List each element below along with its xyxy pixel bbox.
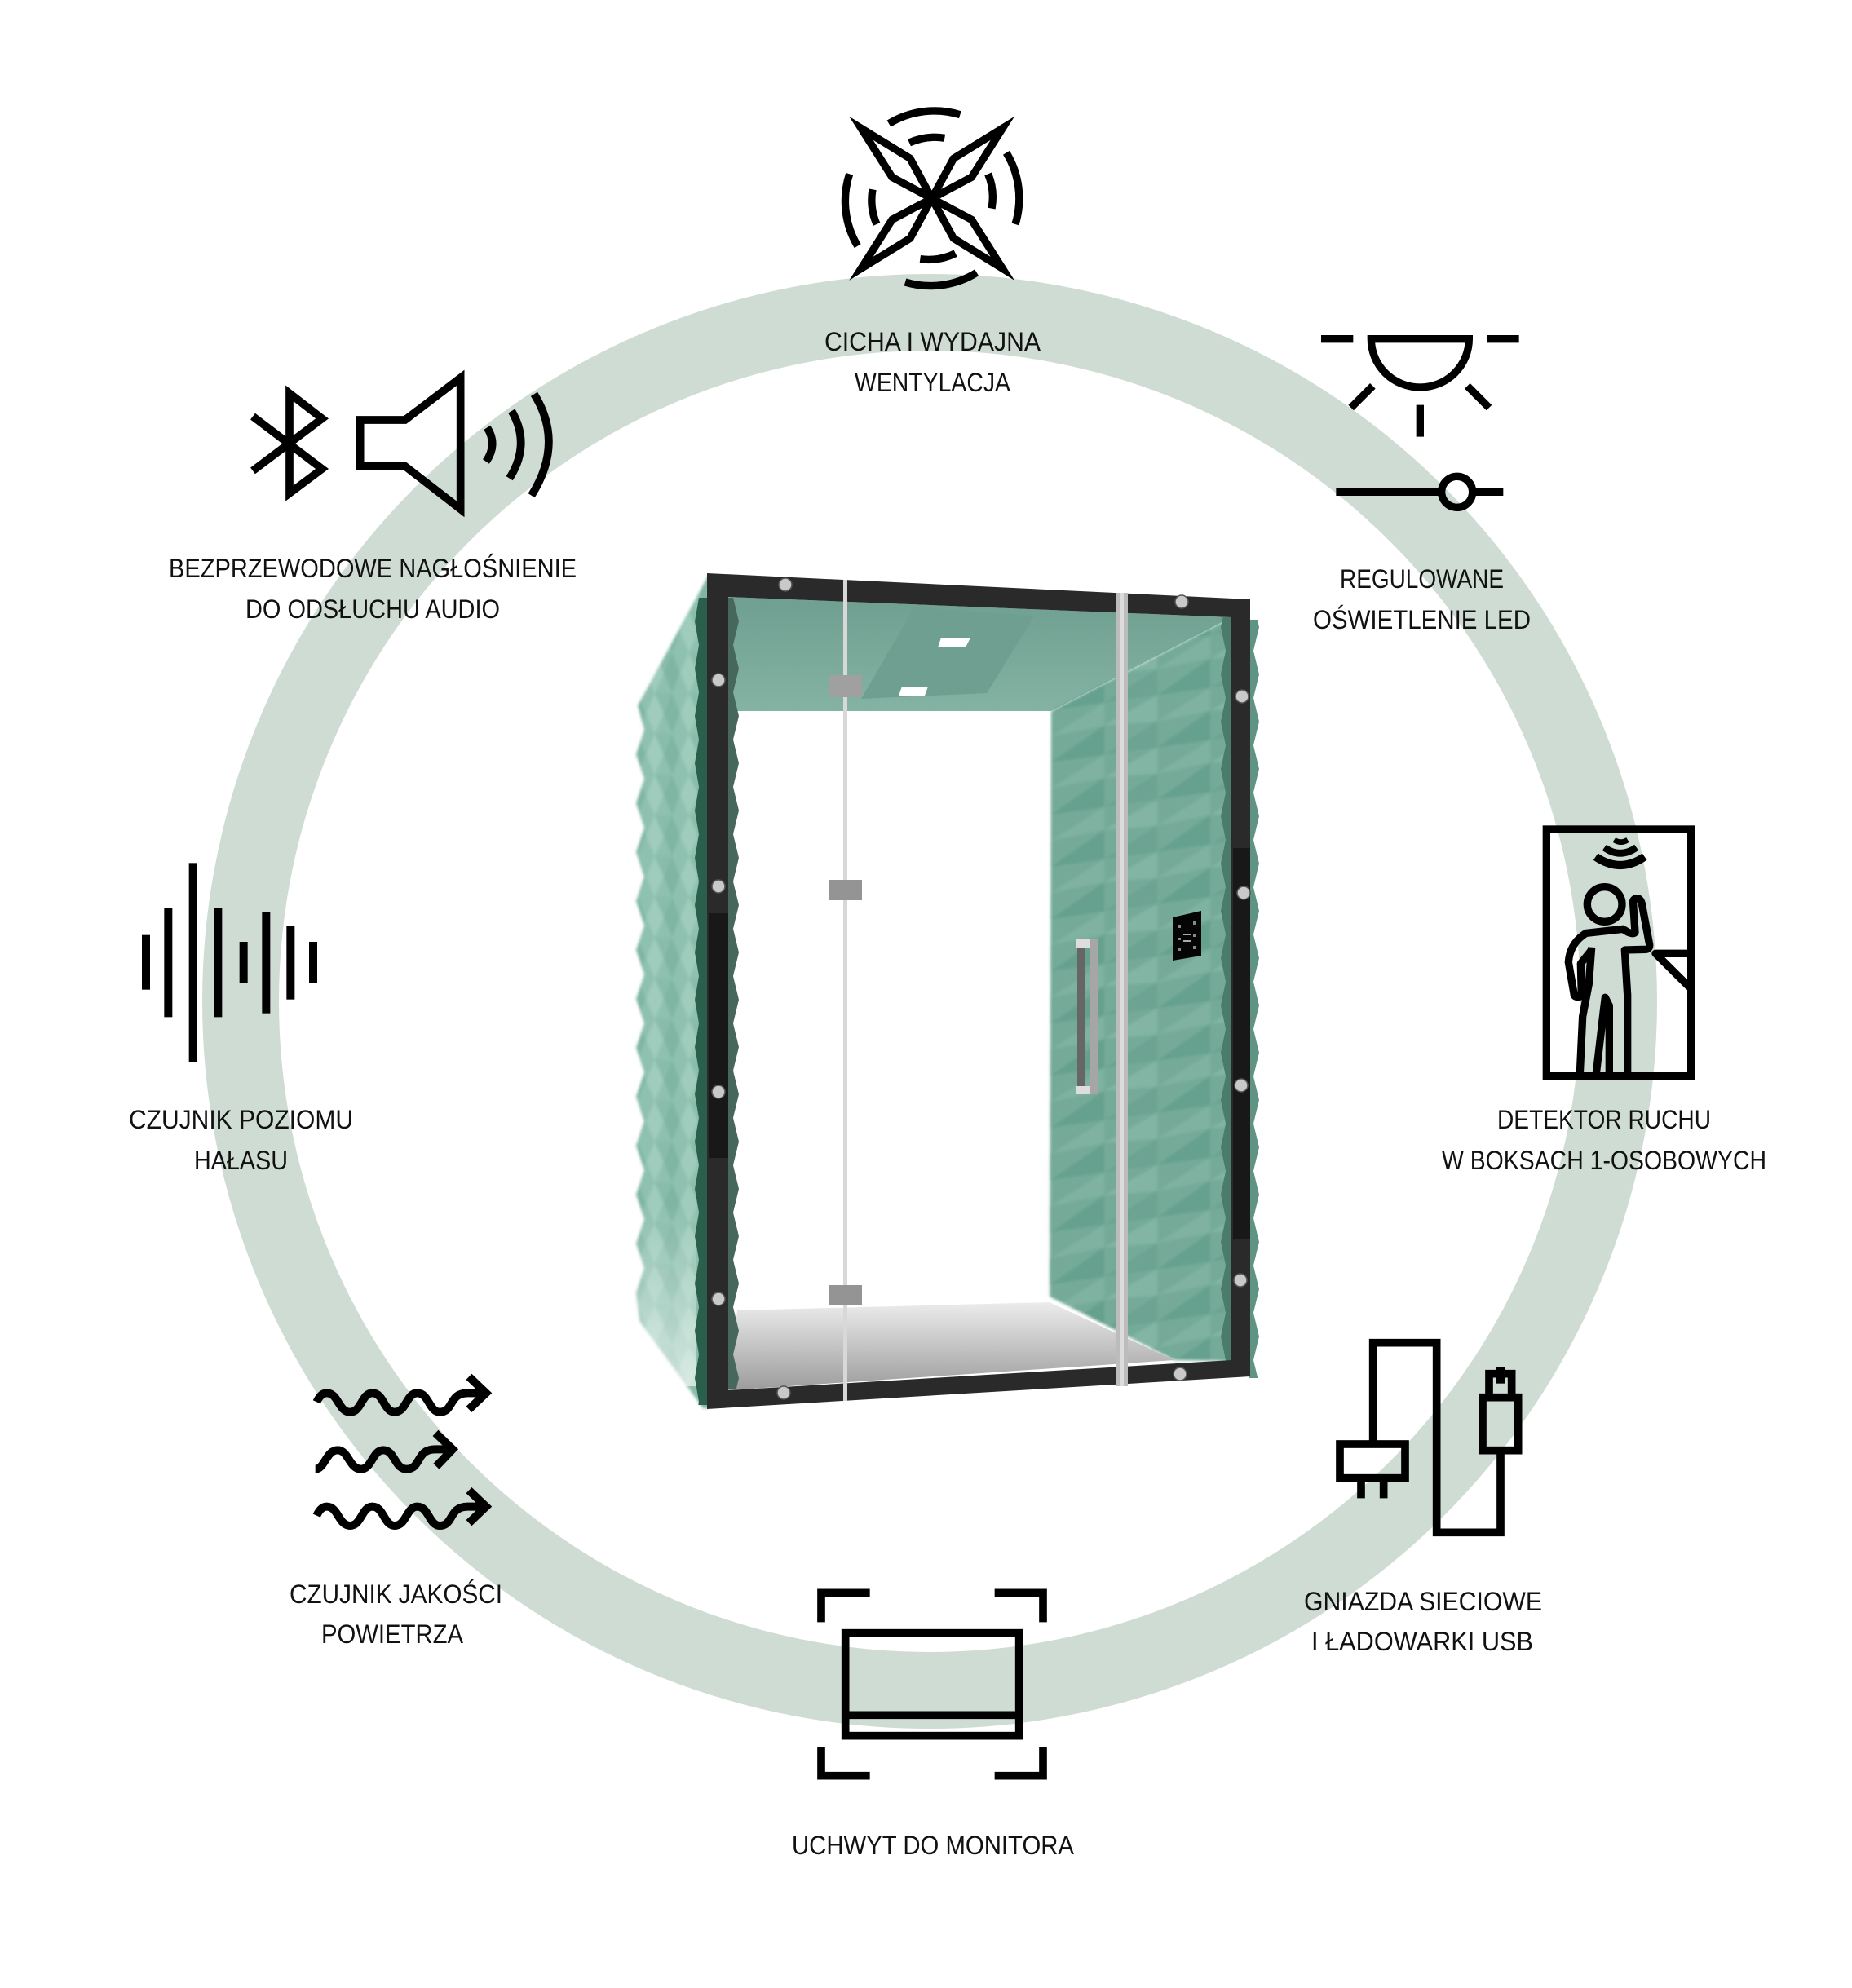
right inner wavy band	[1218, 617, 1233, 1361]
feature: motion detector	[1442, 829, 1766, 1175]
icon: person under motion sensor	[1546, 829, 1691, 1076]
label: power and USB	[1304, 1587, 1542, 1656]
frame bolts	[712, 578, 1250, 1399]
feature: LED lighting	[1313, 339, 1531, 634]
feature: ventilation	[824, 111, 1041, 397]
label: LED lighting: REGULOWANE	[1340, 564, 1504, 594]
black frame	[707, 573, 1250, 1409]
label: LED lighting: OŚWIETLENIE LED	[1313, 605, 1531, 634]
ceiling	[728, 597, 1231, 711]
label: wireless audio	[169, 554, 577, 624]
icon: monitor in frame	[821, 1593, 1043, 1776]
feature: monitor mount	[792, 1593, 1075, 1860]
left panel bottom fade	[633, 1207, 696, 1386]
label: wireless audio: BEZPRZEWODOWE NAGŁOŚNIENIE	[169, 554, 577, 583]
floor	[728, 1302, 1174, 1390]
right acoustic wall	[1050, 617, 1231, 1361]
right door glass edge	[1116, 593, 1128, 1386]
label: noise sensor: HAŁASU	[194, 1146, 288, 1175]
label: air quality sensor: POWIETRZA	[321, 1619, 464, 1649]
ceiling light 2	[899, 687, 928, 696]
label: ventilation: CICHA I WYDAJNA	[824, 327, 1041, 356]
right outer wavy band	[1249, 620, 1262, 1378]
green ring	[241, 312, 1619, 1690]
label: wireless audio: DO ODSŁUCHU AUDIO	[245, 594, 500, 624]
feature: noise sensor	[129, 863, 353, 1175]
label: LED lighting	[1313, 564, 1531, 634]
right door glass edge highlight	[1120, 593, 1124, 1386]
label: motion detector: DETEKTOR RUCHU	[1497, 1105, 1711, 1134]
feature: air quality sensor	[290, 1376, 502, 1649]
door handle	[1076, 939, 1098, 1094]
ceiling lamp panel	[861, 607, 1035, 699]
label: noise sensor	[129, 1105, 353, 1175]
feature: wireless audio	[169, 378, 577, 624]
control panel	[1173, 911, 1201, 961]
booth illustration	[633, 573, 1262, 1409]
bottom hinge	[829, 1285, 862, 1305]
left door glass edge	[843, 580, 847, 1401]
label: ventilation: WENTYLACJA	[855, 368, 1011, 397]
label: monitor mount: UCHWYT DO MONITORA	[792, 1831, 1075, 1860]
label: air quality sensor: CZUJNIK JAKOŚCI	[290, 1579, 502, 1609]
label: power and USB: I ŁADOWARKI USB	[1311, 1627, 1533, 1656]
left outer wavy band	[692, 598, 709, 1405]
feature: power and USB	[1304, 1343, 1542, 1656]
label: noise sensor: CZUJNIK POZIOMU	[129, 1105, 353, 1134]
icon: wavy air arrows	[316, 1376, 487, 1526]
ceiling light 1	[938, 638, 970, 647]
icon: plug and USB cable	[1340, 1343, 1518, 1532]
middle hinge	[829, 880, 862, 900]
icon: fan	[845, 111, 1019, 286]
frame dark sections	[709, 848, 1250, 1239]
icon: sound level bars	[142, 863, 317, 1062]
label: power and USB: GNIAZDA SIECIOWE	[1304, 1587, 1542, 1616]
left acoustic side panel	[636, 573, 709, 1408]
label: air quality sensor	[290, 1579, 502, 1649]
icon: bluetooth and speaker	[253, 378, 549, 509]
label: motion detector: W BOKSACH 1-OSOBOWYCH	[1442, 1146, 1766, 1175]
top hinge	[829, 675, 862, 697]
label: ventilation	[824, 327, 1041, 397]
label: motion detector	[1442, 1105, 1766, 1175]
icon: dimmable lamp	[1321, 339, 1519, 507]
left inner wavy band	[728, 598, 741, 1389]
